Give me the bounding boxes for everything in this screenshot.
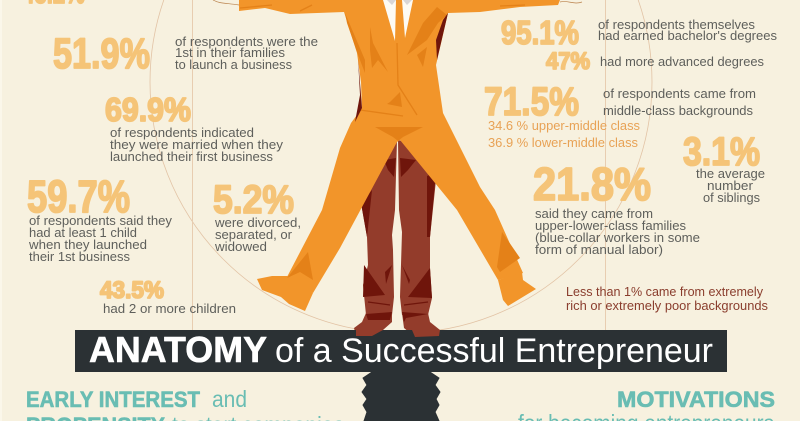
stat: 3.1%: 3.1%	[683, 130, 760, 174]
icon: hand outlines	[213, 0, 582, 5]
stat: 95.1%: of respondents themselves	[598, 17, 755, 32]
heading: early interest: and	[212, 386, 247, 412]
stat: 5.2%: widowed	[214, 239, 267, 254]
stat: 43.5%: 43.5%	[100, 277, 164, 304]
left shoe	[354, 313, 392, 336]
stat: 47%	[546, 48, 764, 75]
stat: 43.5%: had 2 or more children	[103, 301, 236, 316]
stat: 51.9%: of respondents were the	[175, 34, 318, 49]
stat: 95.1%	[501, 14, 777, 51]
left shoe	[257, 276, 313, 311]
stat: 51.9%: to launch a business	[175, 57, 292, 72]
stat: 47%: had more advanced degrees	[600, 54, 764, 69]
heading: early interest	[26, 386, 344, 421]
stat: 21.8%: form of manual labor)	[535, 242, 663, 257]
stat: 69.9%: 69.9%	[105, 91, 191, 128]
suit shading	[287, 7, 520, 280]
stat: 71.5%: middle-class backgrounds	[603, 103, 753, 118]
stat: 59.7%	[27, 171, 172, 264]
stat: 5.2%: 5.2%	[213, 178, 294, 222]
stat: 3.1%: number	[707, 178, 754, 193]
stat: 69.9%: launched their first business	[110, 149, 273, 164]
note: less than 1%: Less than 1% came from extremely	[566, 284, 763, 299]
brown trousers	[354, 140, 440, 337]
stat: 59.7%: 59.7%	[27, 171, 130, 222]
stat: 69.9%: they were married when they	[110, 137, 284, 152]
stat: 5.2%: separated, or	[215, 227, 293, 242]
stat: 71.5%	[484, 80, 756, 150]
stat: 21.8%: said they came from	[535, 206, 653, 221]
stat: 3.1%: of siblings	[703, 190, 760, 205]
heading: motivations: MOTIVATIONS	[617, 387, 775, 412]
stat: 59.7%: their 1st business	[29, 249, 130, 264]
stat: 71.5%: 36.9 % lower-middle class	[488, 135, 638, 150]
figure: entrepreneur in orange suit	[213, 0, 582, 337]
stat: 43.5%	[100, 277, 236, 316]
stat: 47%: 47%	[546, 48, 590, 75]
title banner	[75, 329, 727, 372]
stat: 21.8%: (blue-collar workers in some	[535, 230, 700, 245]
stat: 71.5%: 71.5%	[484, 80, 579, 124]
right shoe	[498, 272, 536, 306]
title banner: of a Successful Entrepreneur	[275, 332, 713, 370]
heading: early interest: EARLY INTEREST	[26, 387, 201, 412]
stat: 69.9%	[105, 91, 284, 164]
orange suit	[239, 0, 560, 293]
stat: 95.1%: had earned bachelor's degrees	[598, 28, 777, 43]
stat: 51.9%: 1st in their families	[175, 45, 286, 60]
white shirt and tie gap	[383, 0, 413, 41]
stat: 21.8%: 21.8%	[533, 158, 651, 210]
title banner: ANATOMY	[89, 329, 267, 370]
stat: 59.7%: when they launched	[28, 237, 147, 252]
stat: 3.1%: the average	[696, 166, 765, 181]
shoe tips over banner	[356, 330, 440, 337]
stat: 51.9%: 51.9%	[53, 30, 150, 78]
note: less than 1%: rich or extremely poor backgrounds	[566, 298, 768, 313]
stat: 59.7%: had at least 1 child	[29, 225, 137, 240]
stat: 95.1%: 95.1%	[501, 14, 579, 51]
stat: 59.7%: of respondents said they	[29, 213, 172, 228]
right shoe	[402, 313, 440, 337]
stat: 3.1%	[683, 130, 765, 205]
stat: 5.2%	[213, 178, 301, 254]
stat: 69.9%: of respondents indicated	[110, 125, 254, 140]
stat: 21.8%	[533, 158, 700, 257]
stat: 5.2%: were divorced,	[214, 215, 301, 230]
heading: motivations	[518, 387, 775, 421]
stat: 71.5%: of respondents came from	[603, 86, 756, 101]
stat: 71.5%: 34.6 % upper-middle class	[488, 118, 640, 133]
stat: 21.8%: upper-lower-class families	[535, 218, 686, 233]
stand below title	[362, 372, 440, 421]
stat: 51.9%	[53, 30, 318, 78]
note: less than 1%	[566, 284, 768, 313]
